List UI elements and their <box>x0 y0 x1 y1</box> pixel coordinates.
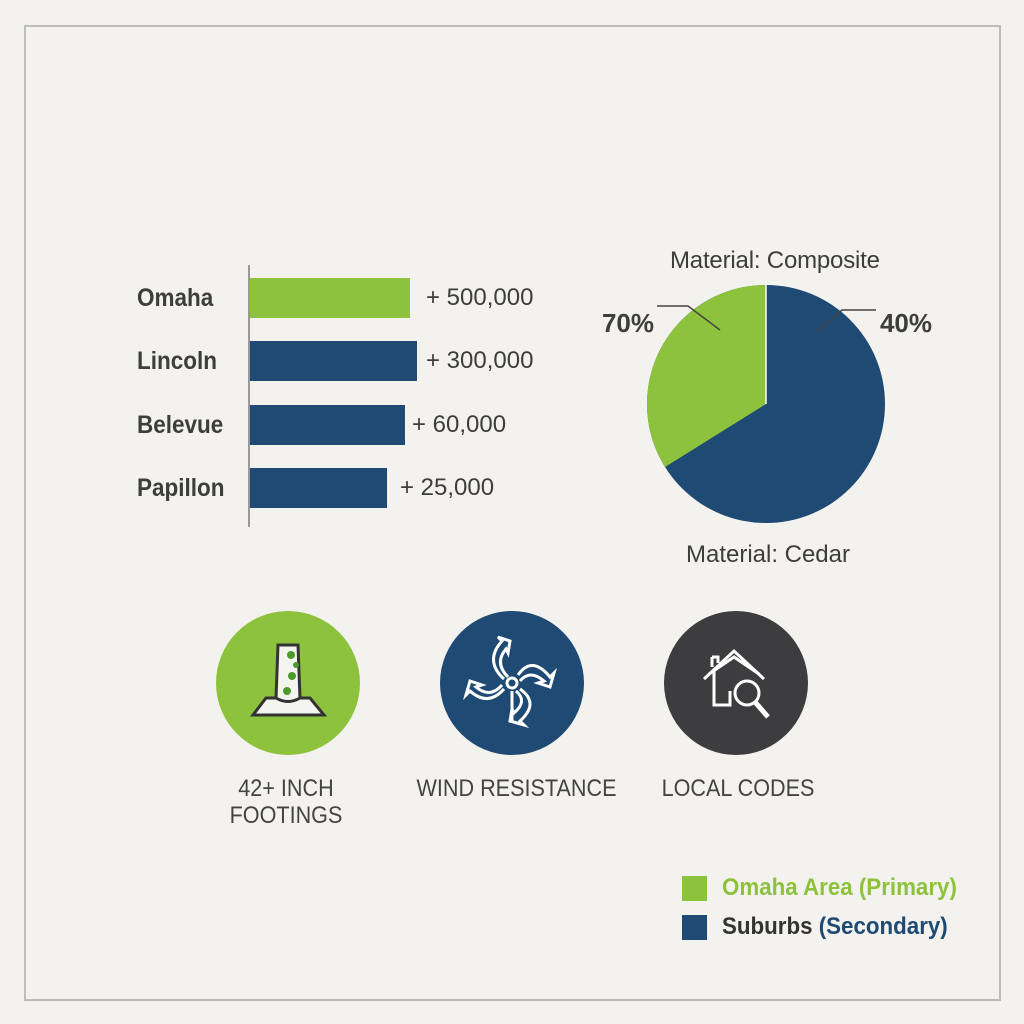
bar chart <box>137 265 533 527</box>
icon: house search <box>664 611 808 755</box>
pie chart: Material: Cedar <box>686 541 850 568</box>
caption: codes: LOCAL CODES <box>662 775 814 802</box>
legend: Suburbs (Secondary) <box>722 913 948 940</box>
legend: Omaha Area (Primary) <box>722 874 957 901</box>
bar: Lincoln: Lincoln <box>137 347 217 375</box>
pie chart: 40% <box>880 308 932 338</box>
caption: footings: 42+ INCH <box>238 775 334 802</box>
icon: wind <box>440 611 584 755</box>
pie chart: Material: Composite <box>670 247 880 274</box>
caption: footings: FOOTINGS <box>230 802 342 829</box>
bar: Omaha: + 500,000 <box>426 284 533 311</box>
bar: Omaha <box>137 278 533 318</box>
pie chart <box>602 247 932 568</box>
caption: footings <box>230 775 342 829</box>
bar: Papillon <box>137 468 494 508</box>
bar: Omaha: Omaha <box>137 284 213 312</box>
caption: wind: WIND RESISTANCE <box>416 775 617 802</box>
bar: Lincoln: + 300,000 <box>426 347 533 374</box>
bar: Belevue: Belevue <box>137 411 223 439</box>
pie chart: 70% <box>602 308 654 338</box>
bar: Belevue <box>137 405 506 445</box>
bar: Papillon: Papillon <box>137 474 225 502</box>
bar: Lincoln <box>137 341 533 381</box>
bar: Papillon: + 25,000 <box>400 474 494 501</box>
legend <box>682 874 957 940</box>
icon: footing <box>216 611 360 755</box>
bar: Belevue: + 60,000 <box>412 411 506 438</box>
